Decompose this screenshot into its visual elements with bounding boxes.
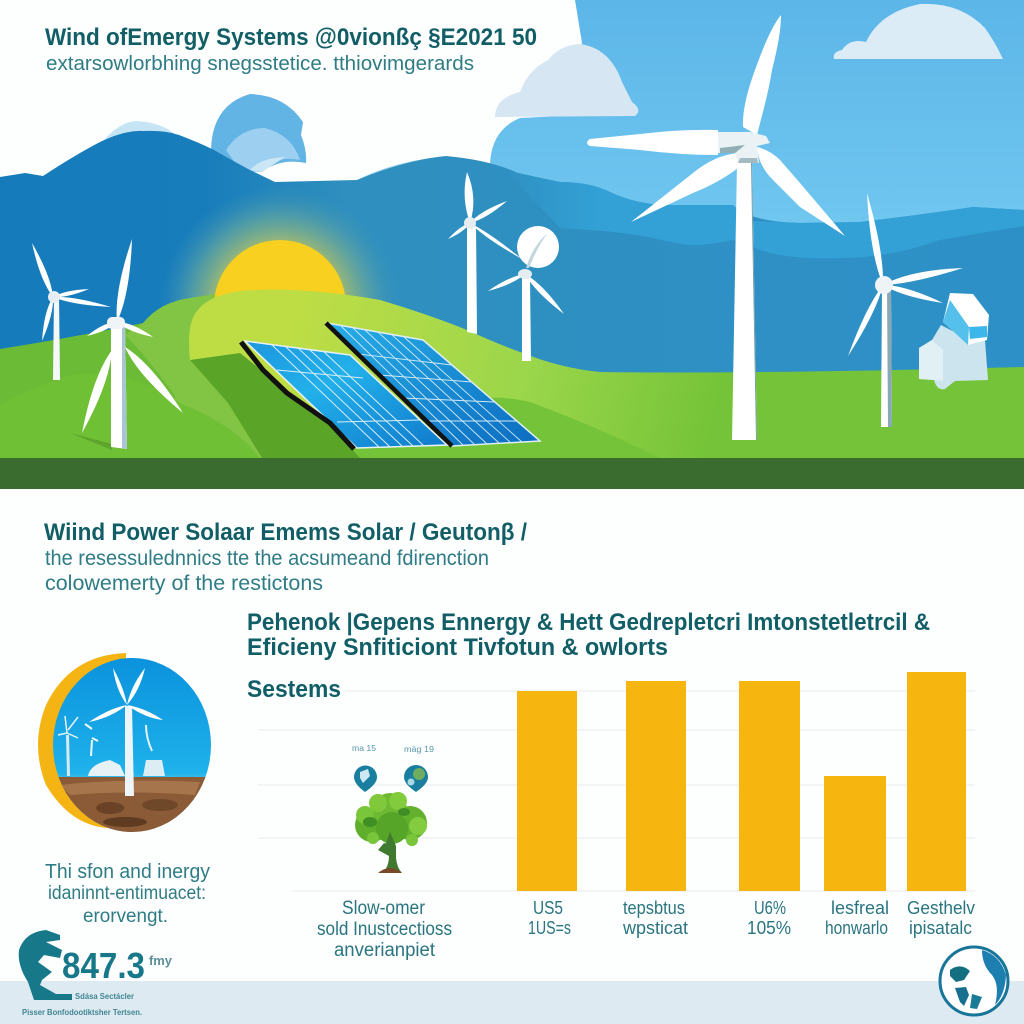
section text: energy sources: colowemerty of the restictons: [45, 572, 323, 595]
hill: front left: [0, 373, 260, 458]
round illustration: wind turbine on soil: [38, 653, 215, 837]
section heading: energy sources: Wiind Power Solaar Emems Solar / Geutonβ /: [44, 519, 527, 546]
solar panel: rear: [326, 323, 540, 446]
icon: tree: [355, 792, 427, 873]
hill: rear green: [0, 323, 300, 460]
cloud: top right: [834, 4, 1003, 59]
bar labels: 105%: [747, 918, 791, 938]
solar panel: front: [241, 341, 447, 449]
ground: hill behind panels: [345, 398, 660, 458]
hill and ground: [189, 290, 1024, 460]
bar labels: U6%: [754, 898, 786, 918]
hill: mid green: [125, 294, 215, 458]
footer band: [0, 981, 1024, 1024]
small labels above pins: ma 15: [352, 744, 377, 753]
icon: pin right: [404, 765, 428, 792]
building: [919, 293, 989, 389]
turbine: large foreground: [587, 15, 845, 440]
caption: centre: anverianpiet: [334, 940, 436, 961]
small labels above pins: mäg 19: [404, 745, 435, 754]
white disc behind turbine: [517, 226, 559, 268]
turbine: front left: [70, 239, 183, 450]
caption: left: Thi sfon and inergy: [45, 861, 210, 883]
mountains: [0, 131, 1024, 380]
caption: centre: [317, 898, 452, 961]
ground band: [0, 458, 1024, 489]
turbine: centre short: [488, 233, 564, 361]
bar labels: Gesthelv: [907, 898, 975, 918]
chart heading: Pehenok |Gepens Ennergy & Hett Gedrepletcri Imtonstetletrcil &: [247, 609, 930, 636]
icon: pin left: [354, 766, 377, 792]
footer text: Pisser Bonfodootiktsher Tertsen.: [22, 1008, 142, 1017]
bar labels: ipisatalc: [909, 918, 972, 938]
title: Wind ofEmergy Systems @0vionßç §E2021 50: [45, 24, 537, 51]
bar labels: honwarlo: [825, 918, 888, 938]
cloud: centre: [495, 44, 638, 117]
subtitle: extarsowlorbhing snegsstetice. tthiovimgerards: [46, 53, 474, 75]
bar labels: [528, 898, 975, 938]
chart heading: [247, 609, 930, 703]
caption: centre: Slow-omer: [342, 898, 426, 919]
caption: left: idaninnt-entimuacet:: [48, 883, 206, 904]
logo: stat figure: fmy: [149, 953, 173, 968]
small labels above pins: [352, 744, 435, 754]
bar labels: tepsbtus: [623, 898, 685, 918]
footer text: [22, 992, 142, 1017]
hill: dark green: [190, 353, 360, 458]
pale ridges: [104, 121, 175, 150]
bar chart: [258, 672, 975, 891]
bar labels: US5: [533, 898, 563, 918]
chart heading: Eficieny Snfiticiont Tivfotun & owlorts: [247, 634, 668, 661]
caption: left: erorvengt.: [83, 906, 168, 927]
chart heading: Sestems: [247, 676, 341, 703]
footer text: Sdása Sectácler: [75, 992, 134, 1001]
sphere behind mountain: [211, 94, 306, 172]
bar labels: wpsticat: [622, 918, 688, 938]
section text: energy sources: [45, 547, 489, 595]
sun glow: [168, 196, 387, 304]
bar labels: lesfreal: [831, 898, 889, 918]
sun: [214, 240, 346, 372]
turbine: centre tall: [448, 172, 522, 334]
logo: stat figure: [19, 930, 173, 1000]
hill: mid green lower flank: [175, 360, 262, 458]
bar labels: 1US=s: [528, 918, 571, 938]
logo: stat figure: 847.3: [62, 945, 145, 986]
section text: energy sources: the resessulednnics tte the acsumeand fdirenction: [45, 547, 489, 570]
panel: landscape scene: [0, 0, 1024, 489]
turbine: right: [848, 193, 963, 427]
caption: left: [45, 861, 210, 927]
mountains: lighter ridge: [500, 165, 1024, 258]
caption: centre: sold Inustcectioss: [317, 919, 452, 940]
icon: globe: [940, 947, 1008, 1015]
sky: [490, 0, 1024, 250]
turbine: far left: [32, 243, 111, 380]
